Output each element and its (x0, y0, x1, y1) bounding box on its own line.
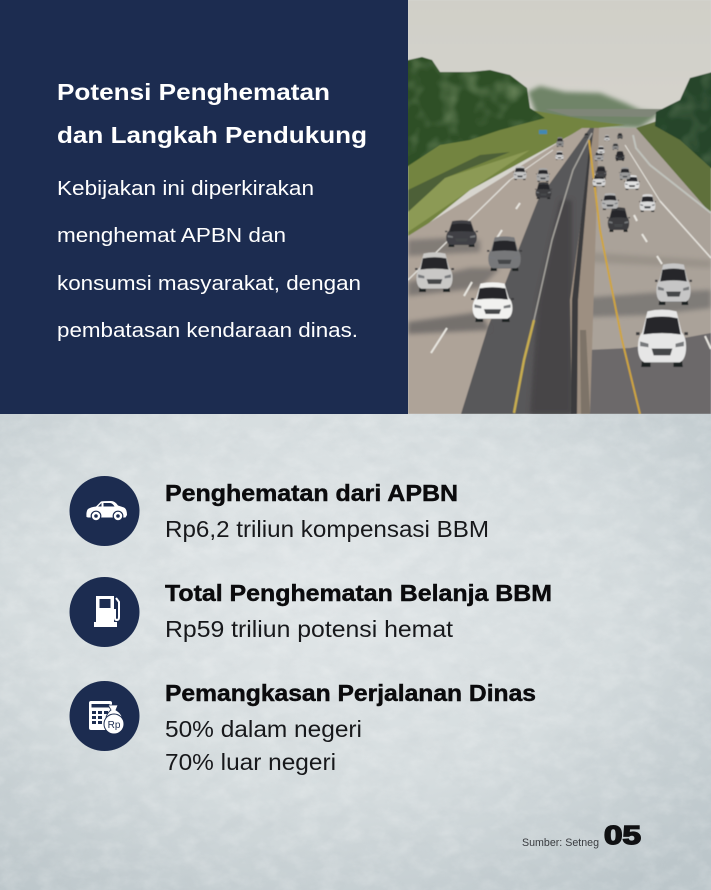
label: Total Penghematan Belanja BBM (165, 580, 552, 606)
icon: calculator and money bag (70, 681, 140, 751)
label: Pemangkasan Perjalanan Dinas (165, 680, 536, 706)
page number: 05 (604, 820, 641, 850)
guardrail (633, 135, 711, 213)
value: Rp59 triliun potensi hemat (165, 616, 454, 642)
left grass bank (408, 110, 625, 240)
label: Penghematan dari APBN (165, 480, 458, 506)
photo: highway with cars (400, 0, 711, 414)
icon: car (70, 476, 140, 546)
source note: Sumber: Setneg (522, 837, 599, 849)
left carriageway (408, 128, 596, 414)
road markings (408, 133, 711, 414)
text block: description: Kebijakan ini diperkirakan (57, 178, 314, 200)
cars (414, 133, 693, 367)
text block: description: pembatasan kendaraan dinas. (57, 320, 358, 342)
panel: navy title block (0, 0, 408, 414)
left trees (400, 57, 545, 170)
heading (57, 79, 367, 148)
median (570, 128, 599, 414)
value: overseas: 70% luar negeri (165, 749, 336, 775)
text block: description: konsumsi masyarakat, dengan (57, 273, 361, 295)
bridge (545, 109, 665, 117)
textured concrete background (0, 413, 711, 890)
text block: description (57, 178, 361, 342)
right carriageway (592, 128, 711, 350)
heading: dan Langkah Pendukung (57, 122, 367, 148)
text block: description: menghemat APBN dan (57, 225, 286, 247)
icon: fuel pump (70, 577, 140, 647)
icon: calculator and money bag: Rp (108, 720, 121, 731)
item: Penghematan dari APBN (70, 476, 489, 546)
heading: Potensi Penghematan (57, 79, 330, 105)
item: Total Penghematan Belanja BBM (70, 577, 552, 647)
value: Rp6,2 triliun kompensasi BBM (165, 516, 489, 542)
item: Pemangkasan Perjalanan Dinas (70, 680, 536, 775)
right grass and trees (636, 120, 711, 214)
value: domestic: 50% dalam negeri (165, 716, 362, 742)
